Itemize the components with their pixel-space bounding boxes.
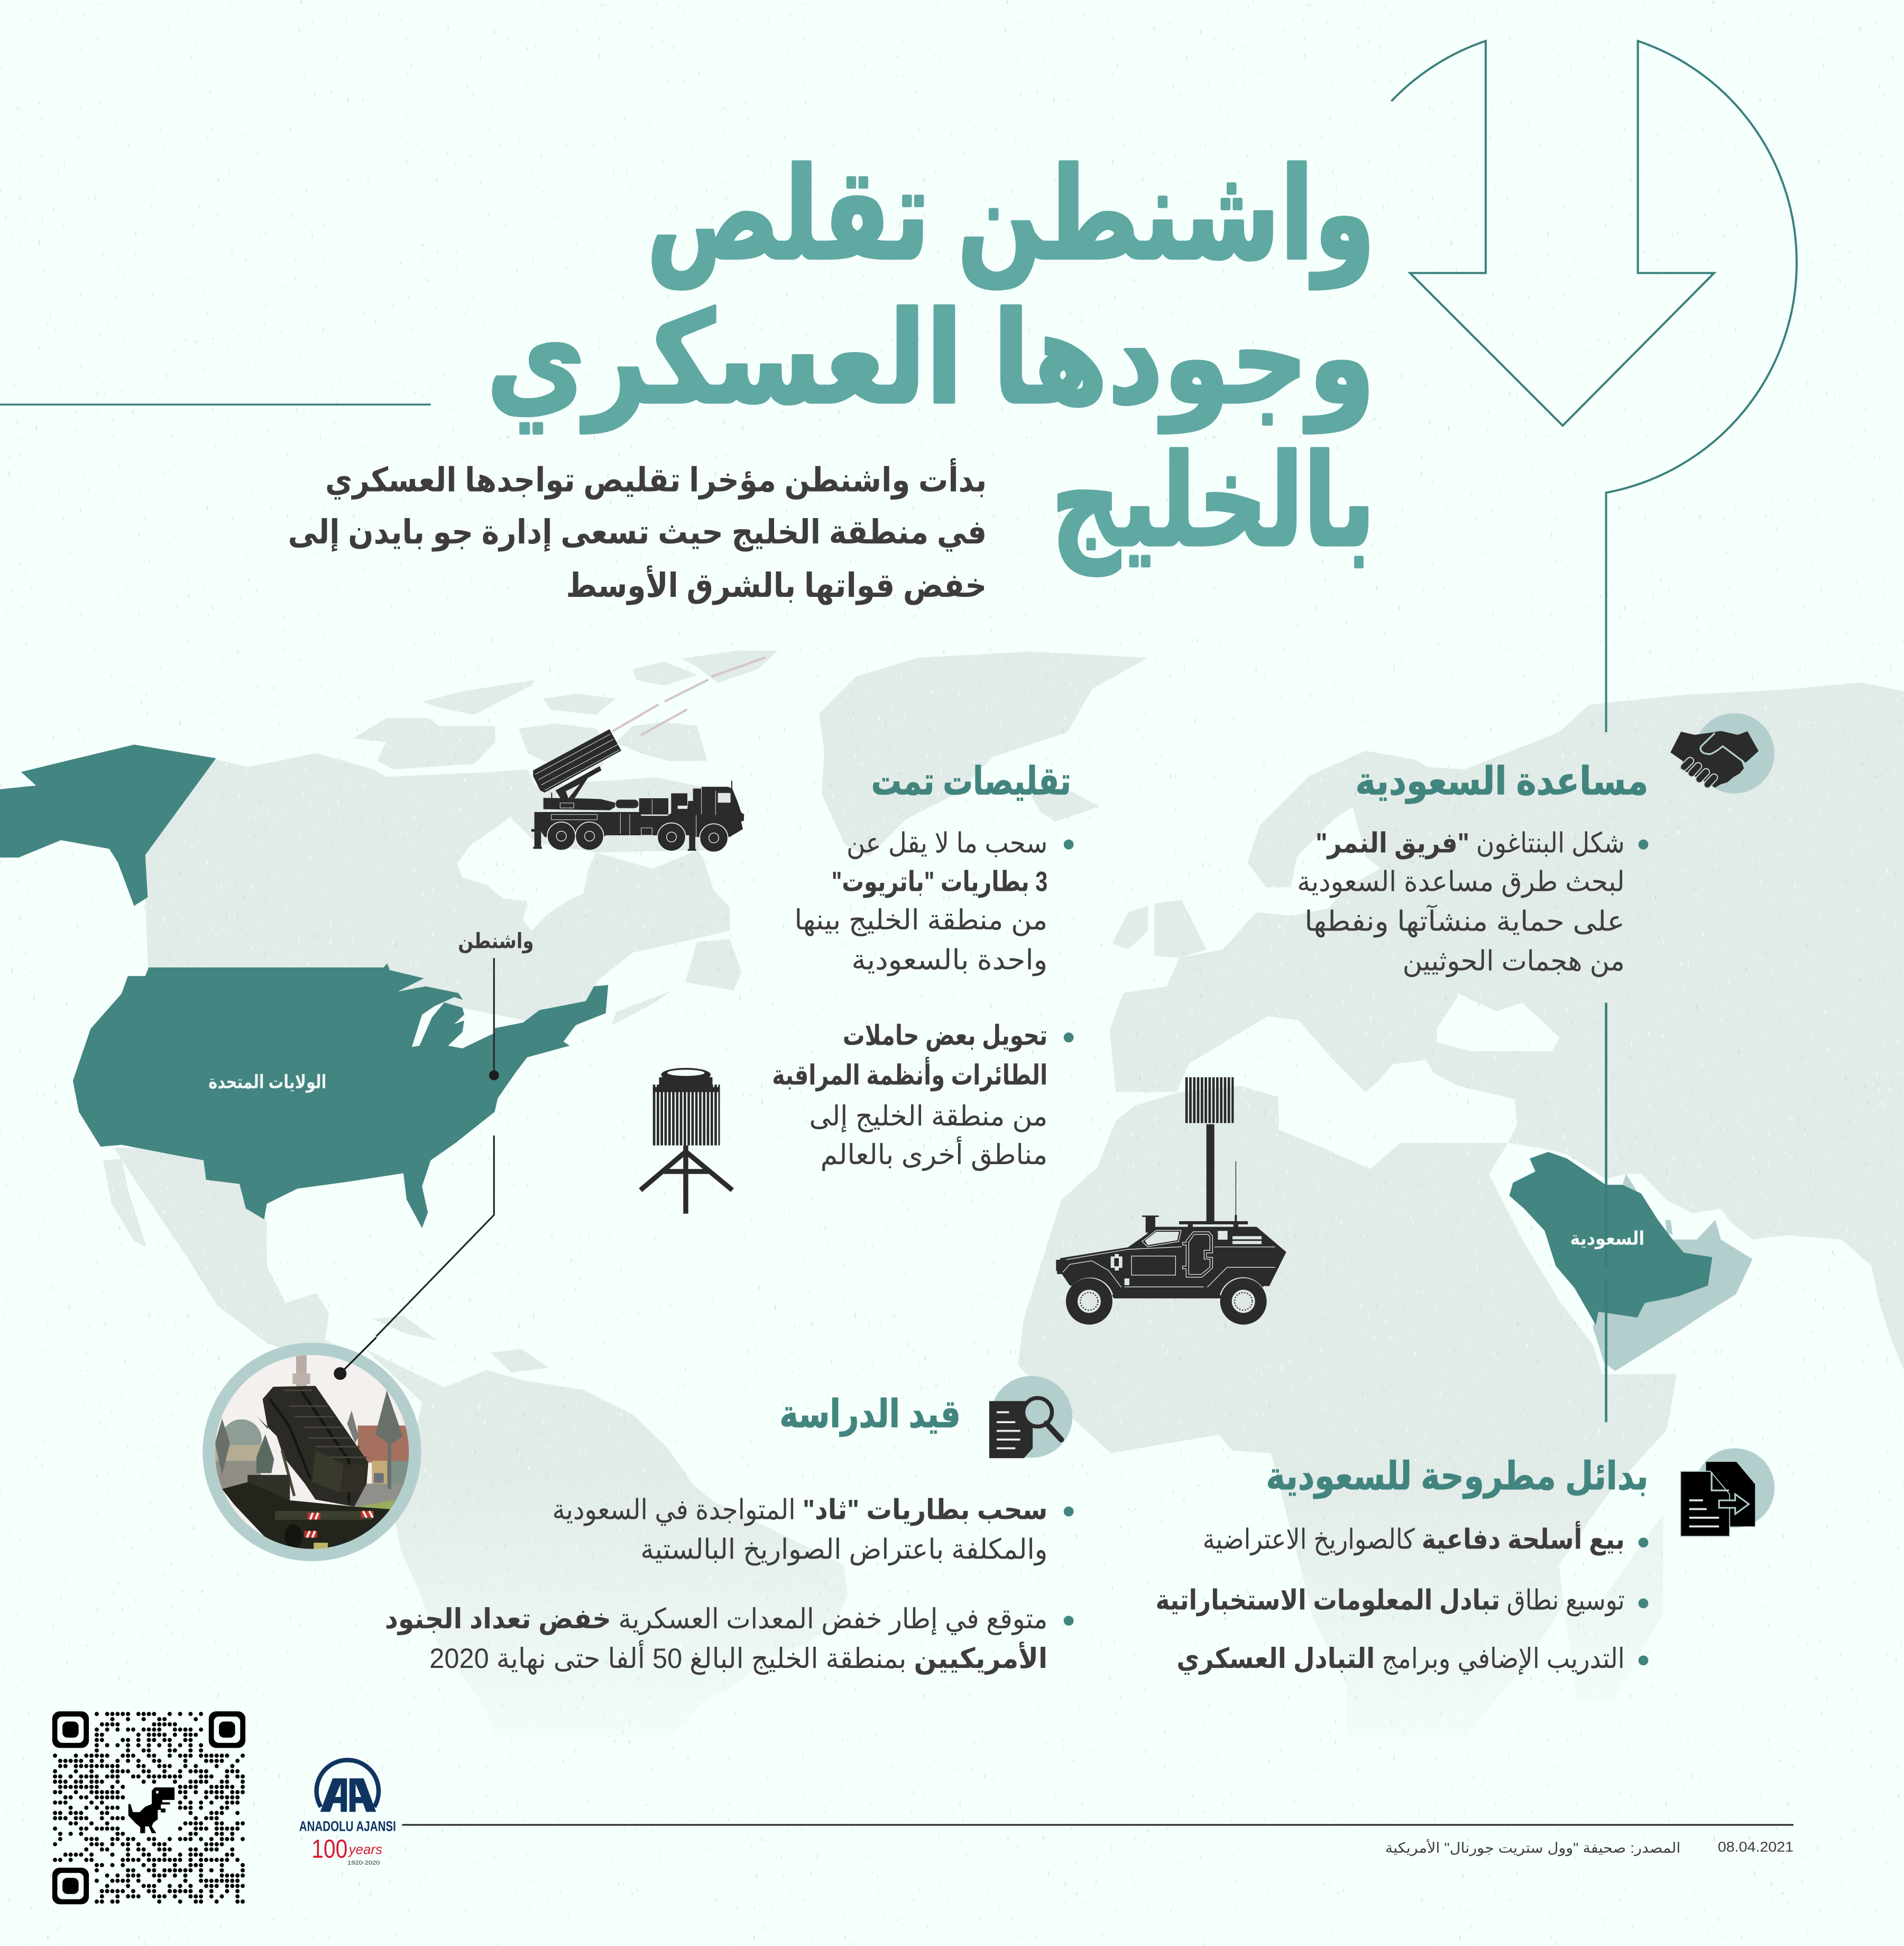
bullet text: لبحث طرق مساعدة السعودية [1297,866,1625,898]
title: وجودها العسكري [486,288,1375,434]
QR code [52,1711,245,1904]
subtitle: في منطقة الخليج حيث تسعى إدارة جو بايدن إلى [288,514,987,552]
map highlight: Saudi Arabia [1509,1152,1713,1325]
bullet text: aircraft carriers: الطائرات وأنظمة المراقبة [772,1057,1047,1092]
icon: handshake [1670,713,1774,794]
bullet text: Patriot batteries: 3 بطاريات "باتريوت" [832,866,1047,898]
bullet text: aircraft carriers: من منطقة الخليج إلى [810,1101,1047,1132]
heading: مساعدة السعودية [1355,760,1648,804]
bullet text: من هجمات الحوثيين [1403,946,1625,977]
bullet text: Patriot batteries: من منطقة الخليج بينها [794,905,1047,936]
icon: armored vehicle with radar mast [1056,1100,1286,1325]
source text: المصدر: صحيفة "وول ستريت جورنال" الأمريكية [1385,1839,1680,1857]
map highlight: United States [73,963,608,1228]
map: Gulf states light highlight [1593,1174,1753,1371]
bullet text: troop reduction [385,1603,1074,1675]
panel: alternatives for Saudi Arabia [1155,1448,1774,1675]
bullet text: THAAD [553,1494,1074,1565]
map label: Saudi Arabia: السعودية [1570,1228,1644,1249]
Anadolu Agency logo: ANADOLU AJANSI [299,1819,396,1834]
Anadolu Agency logo: years [348,1842,382,1857]
subtitle: بدأت واشنطن مؤخرا تقليص تواجدها العسكري [325,458,987,500]
map label: Washington: واشنطن [458,929,534,953]
bullet text: troop reduction: متوقع في إطار خفض المعدات العسكرية خفض تعداد الجنود [385,1603,1047,1635]
bullet text: Patriot batteries: سحب ما لا يقل عن [847,828,1047,860]
callout line to Washington [376,958,494,1336]
bullet text: aircraft carriers: تحويل بعض حاملات [843,1020,1047,1052]
bullet text: THAAD: والمكلفة باعتراض الصواريخ البالستية [640,1534,1047,1565]
icon: document with magnifier [989,1376,1072,1458]
panel: helping Saudi Arabia [1297,713,1774,977]
decorative arrow outline [0,41,1797,1422]
panel: completed reductions [772,760,1074,1171]
photo: Patriot launcher in ring [203,1338,421,1561]
map label: United States: الولايات المتحدة [208,1072,326,1093]
date: 08.04.2021 [1718,1839,1793,1855]
map highlight: Alaska [0,744,216,906]
icon: radar on tripod [640,1068,732,1214]
world map [103,651,1904,1737]
panel: under study [385,1376,1074,1675]
bullet text: training: التدريب الإضافي وبرامج التبادل العسكري [1176,1643,1625,1675]
heading: بدائل مطروحة للسعودية [1266,1455,1648,1499]
title: بالخليج [1051,430,1375,576]
bullet text: aircraft carriers [772,1020,1074,1171]
bullet text [1297,828,1648,977]
heading: تقليصات تمت [871,760,1071,803]
icon: rocket launcher truck [531,729,744,852]
Washington marker [489,1071,499,1080]
bullet text: defensive weapons: بيع أسلحة دفاعية كالصواريخ الاعتراضية [1203,1521,1625,1556]
bullet text: THAAD: سحب بطاريات "ثاد" المتواجدة في السعودية [553,1494,1047,1526]
bullet text: على حماية منشآتها ونفطها [1304,905,1625,938]
Anadolu Agency logo: 1920-2020 [347,1860,380,1866]
heading: قيد الدراسة [779,1393,961,1437]
bullet text: troop reduction: الأمريكيين بمنطقة الخليج البالغ 50 ألفا حتى نهاية 2020 [429,1640,1047,1675]
Anadolu Agency logo: 100 [311,1834,347,1864]
bullet text: aircraft carriers: مناطق أخرى بالعالم [821,1136,1047,1171]
subtitle [288,458,987,605]
bullet text: شكل البنتاغون "فريق النمر" [1316,828,1625,860]
Anadolu Agency logo [299,1760,396,1866]
bullet text: intelligence: توسيع نطاق تبادل المعلومات الاستخباراتية [1155,1585,1625,1617]
bullet text: Patriot batteries [794,828,1074,976]
icon: documents transfer [1680,1448,1774,1536]
map sea cut-outs [1303,829,1604,1375]
subtitle: خفض قواتها بالشرق الأوسط [566,565,987,605]
footer rule [402,1824,1793,1825]
title: واشنطن تقلص [647,143,1375,289]
bullet text: Patriot batteries: واحدة بالسعودية [851,944,1047,976]
title [486,143,1375,576]
missile trails [613,658,765,735]
